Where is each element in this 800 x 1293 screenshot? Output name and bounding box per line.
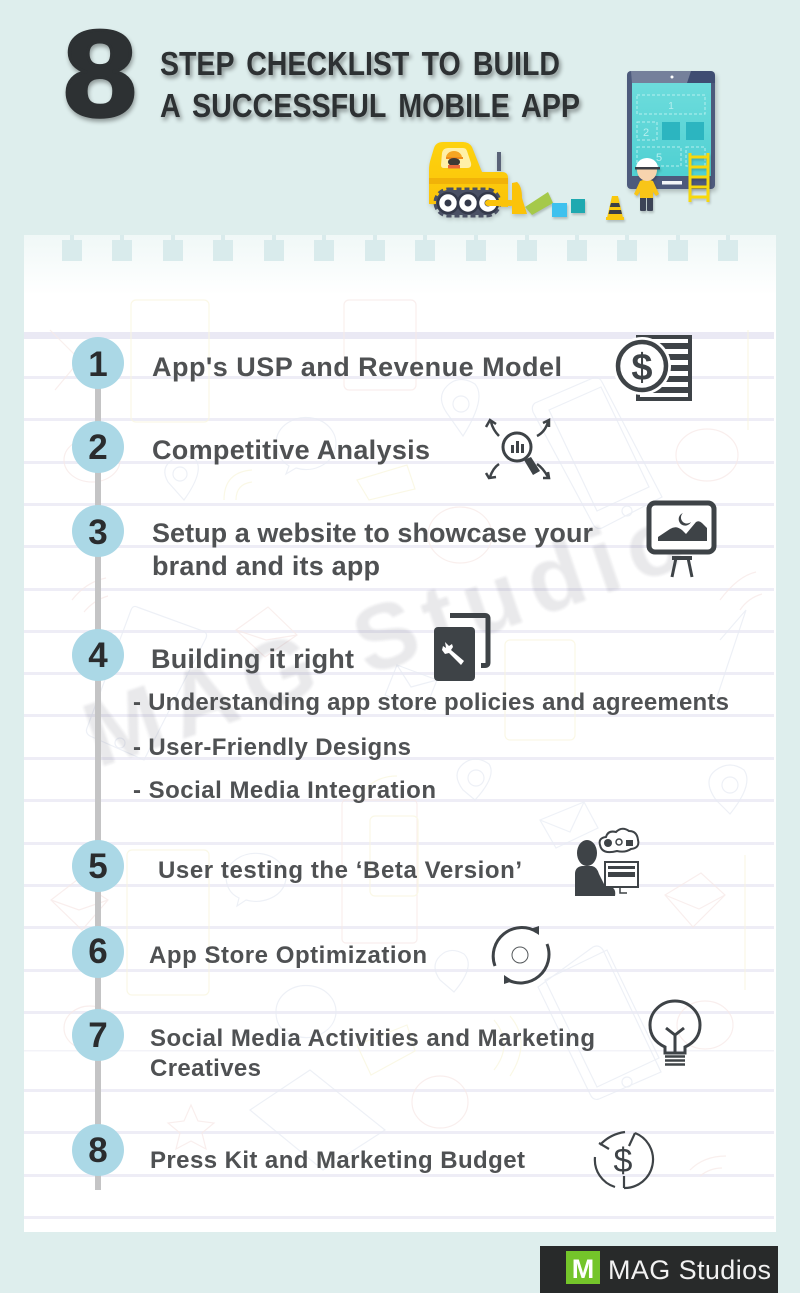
tablet: 5 <box>656 152 662 164</box>
traffic cone <box>606 196 624 220</box>
step 1 <box>72 335 692 401</box>
number badge 4 <box>72 629 124 681</box>
number badge 3 <box>72 505 124 557</box>
step 4 heading: Building it right <box>151 644 354 674</box>
step 5 <box>72 829 638 896</box>
worker <box>634 158 660 211</box>
number badge 8: 8 <box>88 1131 108 1170</box>
number badge 4: 4 <box>88 636 108 675</box>
step 7 text: Social Media Activities and Marketing <box>150 1025 595 1052</box>
number badge 6 <box>72 926 124 978</box>
number badge 7: 7 <box>88 1016 108 1055</box>
icon: dollar cycle: $ <box>614 1142 633 1180</box>
step 3 text <box>152 518 593 581</box>
title line 2: A SUCCESSFUL MOBILE APP <box>160 87 580 124</box>
icon: wrench document <box>434 616 488 681</box>
big number 8: 8 <box>63 6 137 143</box>
logo: M square: M <box>572 1254 594 1284</box>
logo: M square <box>566 1251 600 1284</box>
icon: refresh cycle <box>493 926 549 984</box>
ladder <box>690 153 708 202</box>
bulldozer <box>429 142 527 215</box>
tablet <box>627 71 715 189</box>
step 4 sub-items: - Social Media Integration <box>133 777 436 804</box>
paper binding tabs <box>62 235 738 261</box>
step 7 text <box>150 1025 595 1082</box>
step 6 <box>72 926 549 984</box>
number badge 7 <box>72 1009 124 1061</box>
icon: dollar stack: $ <box>631 347 653 389</box>
watermark: MAG Studio <box>71 487 696 787</box>
illustration: app construction <box>429 71 715 220</box>
step 8 text: Press Kit and Marketing Budget <box>150 1147 525 1174</box>
title line 1: STEP CHECKLIST TO BUILD <box>160 45 560 82</box>
footer logo bar <box>540 1246 778 1293</box>
panel: notebook paper <box>24 235 776 1232</box>
number badge 1: 1 <box>88 345 108 384</box>
number badge 5: 5 <box>88 847 108 886</box>
icon: magnifier with arrows <box>486 420 549 478</box>
step 1 text: App's USP and Revenue Model <box>152 352 562 382</box>
brand name: MAG Studios <box>608 1255 771 1285</box>
number badge 8 <box>72 1124 124 1176</box>
step 3 text: brand and its app <box>152 551 380 581</box>
step 5 text: User testing the ‘Beta Version’ <box>158 857 522 884</box>
timeline rail <box>95 364 101 1190</box>
title <box>63 6 580 143</box>
step 4 <box>72 616 729 804</box>
step 3 text: Setup a website to showcase your <box>152 518 593 548</box>
number badge 2: 2 <box>88 428 108 467</box>
number badge 6: 6 <box>88 932 108 971</box>
step 6 text: App Store Optimization <box>149 942 427 969</box>
step 7 <box>72 1001 700 1082</box>
tablet: 2 <box>643 127 649 139</box>
blocks <box>525 192 585 217</box>
step 4 sub-items <box>133 689 729 804</box>
step 7 text: Creatives <box>150 1055 261 1082</box>
icon: user testing <box>575 829 638 896</box>
step 2 <box>72 420 549 478</box>
background doodles <box>50 300 762 1176</box>
icon: picture on easel <box>649 503 714 577</box>
number badge 1 <box>72 337 124 389</box>
tablet: 1 <box>668 101 674 112</box>
number badge 5 <box>72 840 124 892</box>
number badge 2 <box>72 421 124 473</box>
step 4 sub-items: - Understanding app store policies and agreements <box>133 689 729 716</box>
step 8 <box>72 1124 653 1188</box>
number badge 3: 3 <box>88 513 108 552</box>
step 4 sub-items: - User-Friendly Designs <box>133 734 411 761</box>
icon: light bulb <box>650 1001 700 1064</box>
step 3 <box>72 503 714 581</box>
icon: dollar stack <box>613 335 692 401</box>
step 2 text: Competitive Analysis <box>152 435 430 465</box>
icon: dollar cycle <box>595 1132 653 1188</box>
